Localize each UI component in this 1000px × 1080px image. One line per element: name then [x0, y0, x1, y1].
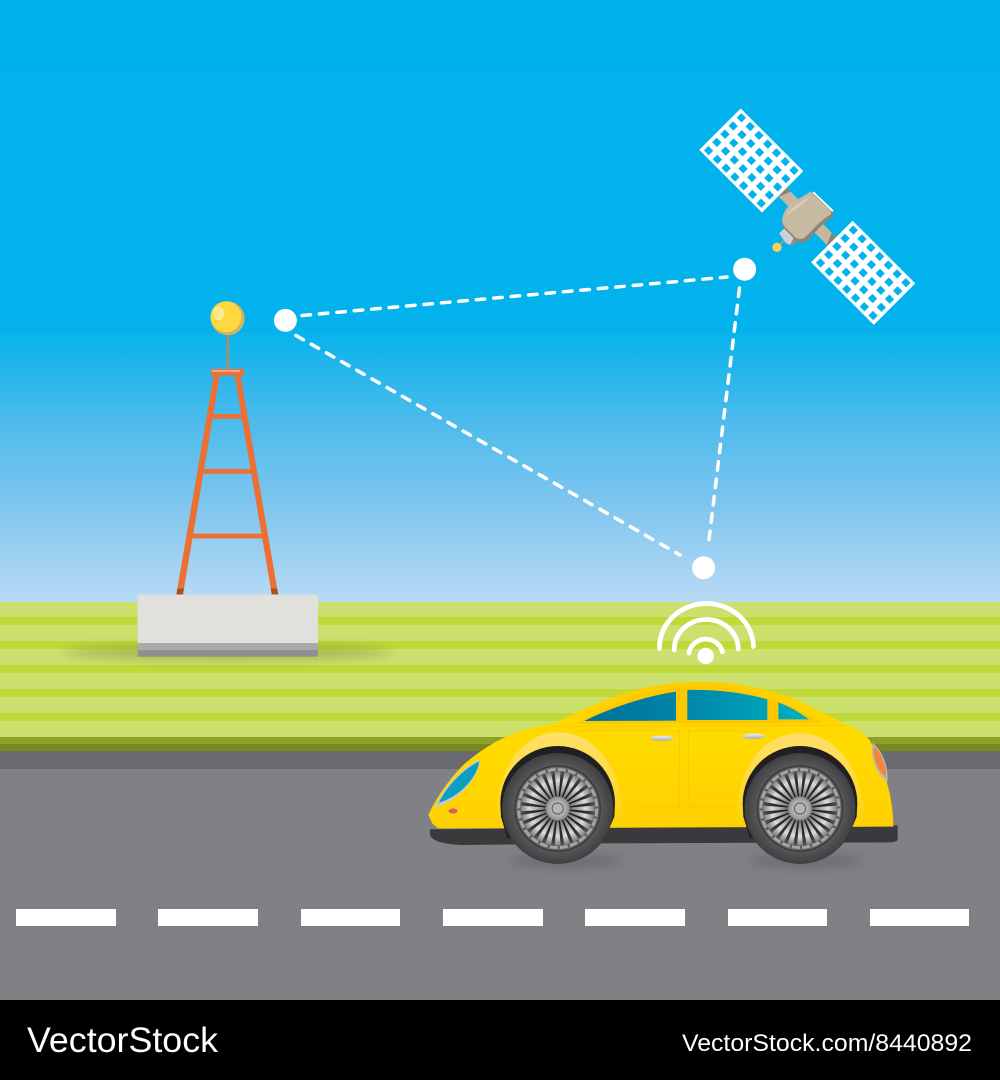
- belt line: [552, 725, 845, 727]
- road lane markings: [16, 909, 969, 926]
- front fender arch: [496, 732, 624, 827]
- car body: [428, 682, 893, 828]
- rear fender arch: [736, 733, 865, 827]
- dashed signal triangle: [296, 277, 740, 555]
- indicator lamp: [448, 808, 458, 814]
- node: tower: [274, 309, 297, 332]
- nozzle: [779, 226, 799, 246]
- front wheel: [502, 753, 613, 864]
- striped grass field: [0, 602, 1000, 751]
- node: satellite: [733, 258, 756, 281]
- footer bar: [0, 1000, 1000, 1080]
- front window: [584, 692, 676, 721]
- image reference: VectorStock.com/8440892: [682, 1030, 972, 1057]
- concrete base: [138, 594, 318, 657]
- solar panel lower right: [811, 221, 915, 325]
- ground shadow: [63, 647, 393, 657]
- road: [0, 751, 1000, 1000]
- body: [782, 192, 833, 243]
- base station tower: [63, 301, 393, 657]
- door seams: [575, 731, 769, 808]
- antenna: [772, 238, 787, 252]
- boom: [777, 187, 837, 246]
- rear wheel: [744, 753, 856, 864]
- door handles: [650, 736, 674, 741]
- gold sphere: [210, 301, 245, 335]
- brand name: VectorStock: [27, 1021, 219, 1060]
- ground shadows: [508, 855, 864, 867]
- solar panel upper left: [699, 108, 803, 213]
- sky background: [0, 0, 1000, 604]
- yellow car: [428, 682, 898, 867]
- door panel highlight: [620, 783, 753, 827]
- underbody skirt: [430, 825, 898, 845]
- satellite: [699, 108, 915, 325]
- lattice mast: [176, 335, 278, 594]
- wifi signal icon: [659, 603, 754, 664]
- window surround: [577, 686, 823, 724]
- tail light: [872, 743, 888, 782]
- node: car: [692, 556, 715, 579]
- headlight: [435, 759, 481, 808]
- wheel arches: [500, 746, 615, 841]
- rear window: [778, 702, 809, 719]
- middle window: [687, 690, 767, 720]
